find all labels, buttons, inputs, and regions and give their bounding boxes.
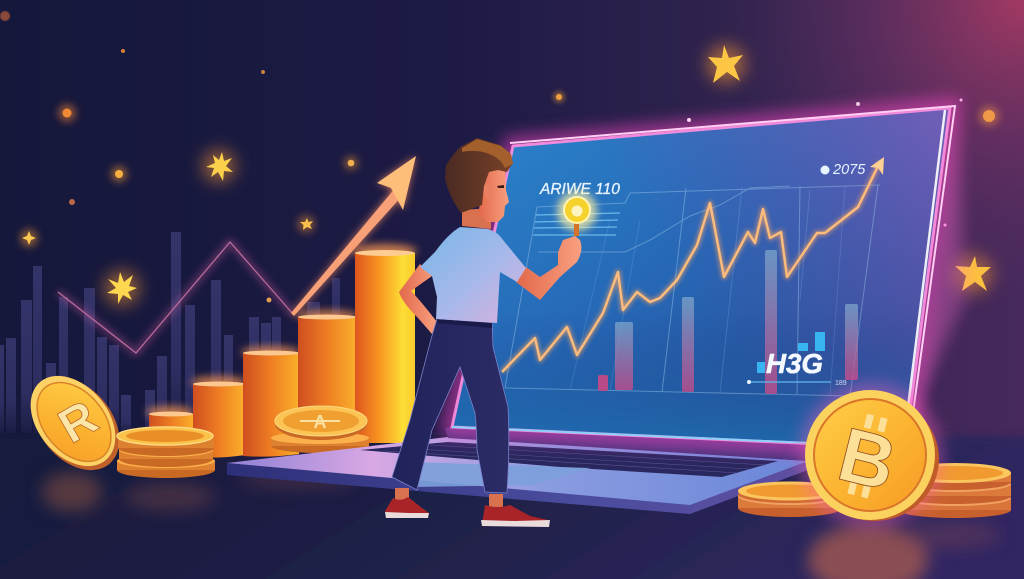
left arm	[399, 264, 437, 334]
star: small mid	[297, 215, 315, 233]
translucent screen bars	[598, 250, 858, 394]
screen logo badge	[757, 332, 825, 379]
coin stack left	[117, 427, 215, 478]
orange 3D column chart	[146, 244, 417, 458]
tilted coin left: R	[50, 391, 107, 454]
character	[385, 138, 581, 527]
right shoe	[481, 505, 550, 527]
coin stack centre right	[738, 482, 842, 517]
coin stack right	[899, 463, 1011, 518]
star: lower left	[104, 270, 140, 306]
hinge	[445, 427, 810, 461]
laptop base front edge	[227, 461, 808, 514]
column 3	[241, 346, 301, 457]
screen slider label: 189	[835, 380, 847, 387]
column 1	[146, 406, 194, 434]
star: upper left	[202, 149, 236, 183]
ankles	[395, 488, 409, 500]
chart grid	[505, 185, 880, 396]
star: top centre	[706, 44, 746, 84]
trackpad	[414, 462, 590, 487]
star: right	[953, 254, 993, 294]
floor	[0, 436, 1024, 579]
column 4	[297, 310, 359, 442]
background bar chart	[0, 232, 340, 433]
coin stack middle: A	[314, 412, 326, 432]
screen slider label	[747, 380, 847, 387]
large bitcoin coin: B	[830, 412, 904, 508]
stars and sparkles	[0, 11, 999, 306]
rising trend line with arrow	[58, 156, 416, 353]
star: left small	[20, 229, 38, 247]
panel text lines	[533, 213, 620, 235]
trousers	[392, 319, 509, 493]
laptop screen	[452, 104, 965, 448]
eye	[497, 185, 504, 188]
tilted coin left	[13, 359, 137, 487]
glowing dots	[0, 11, 999, 302]
shirt	[420, 227, 526, 323]
neck	[462, 208, 491, 229]
neon frame	[452, 108, 950, 448]
coin stack middle	[271, 406, 369, 453]
laptop deck	[227, 437, 808, 505]
right arm and hand	[516, 236, 581, 300]
glowing coin held in hand	[557, 191, 597, 236]
screen year label: 2075	[832, 162, 866, 178]
face	[478, 166, 509, 222]
column 2	[191, 376, 247, 458]
column 5	[353, 244, 417, 443]
large bitcoin coin	[799, 383, 943, 527]
screen outer glow	[452, 108, 950, 448]
screen logo badge: H3G	[766, 348, 823, 379]
ear	[483, 184, 493, 198]
keyboard	[360, 442, 778, 477]
left shoe	[385, 497, 429, 518]
screen arrow head	[870, 157, 884, 175]
floor reflections	[42, 466, 1000, 579]
screen line chart	[502, 162, 880, 372]
screen title: ARIWE 110	[539, 181, 620, 198]
laptop	[227, 427, 810, 514]
hair	[445, 138, 513, 213]
screen panel	[452, 108, 950, 448]
